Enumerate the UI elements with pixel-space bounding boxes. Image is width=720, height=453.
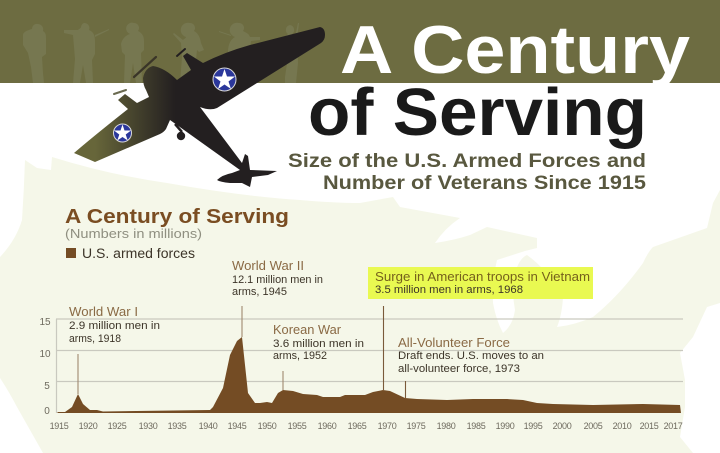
- annotation: World War II: [232, 259, 323, 298]
- annotation: All-Volunteer Force: [398, 336, 544, 375]
- x axis labels: 1980: [437, 421, 456, 431]
- x axis labels: 1935: [168, 421, 187, 431]
- chart units note: (Numbers in millions): [65, 226, 202, 241]
- star insignia: right wing: [213, 68, 236, 91]
- subtitle: Size of the U.S. Armed Forces and: [288, 150, 646, 172]
- annotation: All-Volunteer Force: all-volunteer force, 1973: [398, 363, 520, 375]
- x axis labels: 2005: [584, 421, 603, 431]
- annotation: World War II: World War II: [232, 259, 304, 273]
- title: A Century: [340, 12, 690, 88]
- background map of the United States: [0, 157, 720, 453]
- y axis labels: 10: [39, 349, 51, 360]
- title: [308, 12, 690, 150]
- area series: [57, 337, 681, 413]
- callout: Vietnam surge highlight: 3.5 million men in arms, 1968: [375, 284, 523, 296]
- chart heading: A Century of Serving: [65, 206, 289, 228]
- annotation: Korean War: [273, 323, 364, 362]
- annotation: Korean War: 3.6 million men in: [273, 338, 364, 350]
- x axis labels: 1920: [79, 421, 98, 431]
- annotation: World War II: arms, 1945: [232, 286, 287, 298]
- y axis labels: 15: [39, 317, 51, 328]
- soldier silhouettes: [23, 23, 299, 83]
- title: of Serving: [308, 75, 647, 150]
- annotation: All-Volunteer Force: All-Volunteer Force: [398, 336, 510, 350]
- x axis labels: 2000: [553, 421, 572, 431]
- x axis labels: 1915: [50, 421, 69, 431]
- annotation: All-Volunteer Force: Draft ends. U.S. moves to an: [398, 350, 544, 362]
- header band: [0, 0, 720, 83]
- y axis labels: [39, 317, 51, 417]
- x axis labels: 1955: [288, 421, 307, 431]
- x axis labels: 1975: [407, 421, 426, 431]
- x axis labels: 1930: [139, 421, 158, 431]
- star insignia: left wing: [114, 124, 132, 142]
- x axis labels: 2010: [613, 421, 632, 431]
- x axis labels: 1950: [258, 421, 277, 431]
- x axis labels: [50, 421, 683, 431]
- x axis labels: 1960: [318, 421, 337, 431]
- y axis labels: 5: [44, 381, 50, 392]
- x axis labels: 1965: [348, 421, 367, 431]
- x axis labels: 1990: [496, 421, 515, 431]
- plane propellers and tail wheel: [114, 49, 185, 140]
- airplane: [74, 27, 325, 187]
- y axis labels: 0: [44, 406, 50, 417]
- area chart: U.S. armed forces: [39, 306, 683, 431]
- x axis labels: 2017: [664, 421, 683, 431]
- annotation: Korean War: Korean War: [273, 323, 341, 337]
- x axis labels: 1925: [108, 421, 127, 431]
- subtitle: [288, 150, 646, 194]
- annotation: World War I: 2.9 million men in: [69, 320, 160, 332]
- x axis labels: 1995: [524, 421, 543, 431]
- x axis labels: 1945: [228, 421, 247, 431]
- annotation: World War I: arms, 1918: [69, 333, 121, 345]
- legend: U.S. armed forces: [82, 246, 195, 261]
- x axis labels: 1940: [199, 421, 218, 431]
- annotation: World War I: [69, 305, 160, 345]
- x axis labels: 1970: [378, 421, 397, 431]
- callout: Vietnam surge highlight: [368, 267, 593, 299]
- annotation: Korean War: arms, 1952: [273, 350, 327, 362]
- plane body and wings: [74, 27, 325, 187]
- callout: Vietnam surge highlight: Surge in American troops in Vietnam: [375, 270, 590, 284]
- annotation: World War II: 12.1 million men in: [232, 274, 323, 286]
- subtitle: Number of Veterans Since 1915: [323, 172, 646, 194]
- gridlines: [56, 319, 683, 413]
- x axis labels: 2015: [640, 421, 659, 431]
- x axis labels: 1985: [467, 421, 486, 431]
- leader lines: [78, 306, 406, 398]
- annotation: World War I: World War I: [69, 305, 138, 319]
